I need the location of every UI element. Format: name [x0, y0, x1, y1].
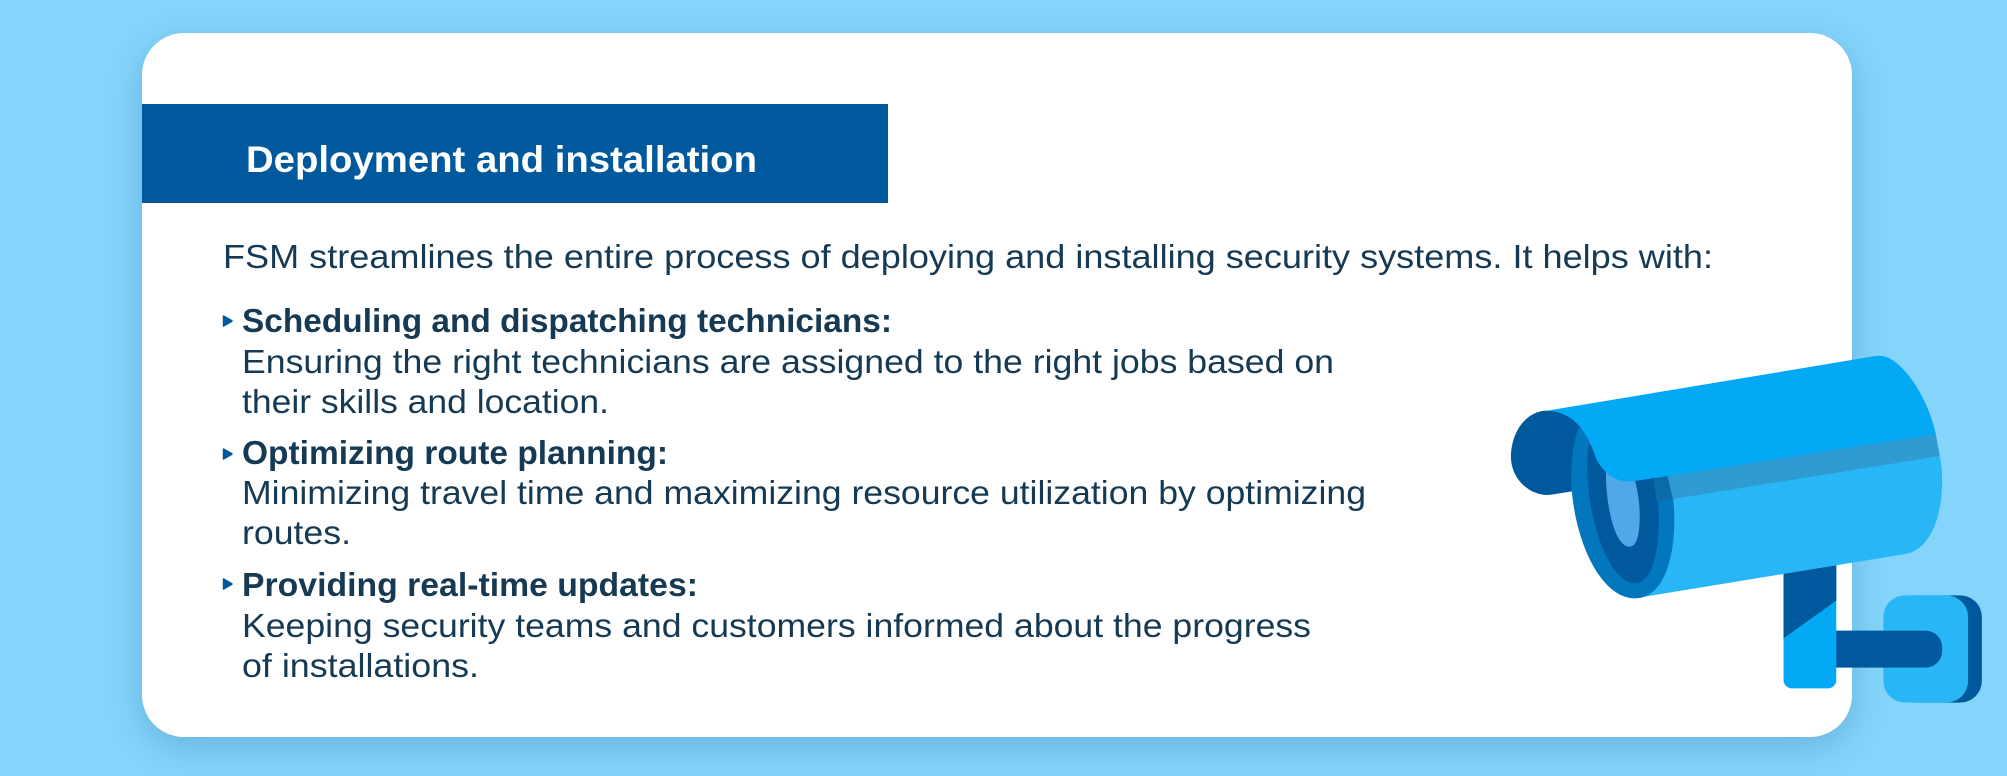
list item: scheduling: their skills and location. — [242, 384, 609, 421]
list item: scheduling: Scheduling and dispatching technicians: — [242, 302, 892, 339]
camera stand — [1784, 563, 1836, 688]
list item: real-time updates: Keeping security teams and customers informed about the progress — [242, 608, 1311, 645]
bullet arrow — [224, 579, 232, 589]
band shadow on lens — [1653, 476, 1673, 502]
list item: real-time updates: Providing real-time updates: — [242, 566, 698, 603]
lens ring — [1571, 428, 1674, 598]
bullet arrow — [224, 449, 232, 459]
heading banner: Deployment and installation — [246, 138, 757, 180]
list item: route planning: Optimizing route planning: — [242, 434, 668, 471]
camera hood — [1547, 356, 1936, 481]
list item: scheduling: Ensuring the right technicians are assigned to the right jobs based on — [242, 344, 1334, 381]
list item: real-time updates: of installations. — [242, 648, 479, 685]
camera body lower — [1635, 456, 1942, 598]
list item: route planning: routes. — [242, 515, 351, 552]
intro text: FSM streamlines the entire process of deploying and installing security systems. It helps with: — [223, 239, 1713, 276]
icon: security camera — [1511, 356, 1982, 703]
lens glass — [1606, 470, 1640, 547]
heading banner — [142, 104, 888, 203]
list item: real-time updates — [224, 566, 1311, 685]
list item: route planning — [224, 434, 1366, 552]
wall plate — [1883, 595, 1982, 703]
panel: white card — [142, 33, 1852, 737]
camera rear cap — [1511, 411, 1588, 495]
list item: route planning: Minimizing travel time and maximizing resource utilization by optimizing — [242, 475, 1366, 512]
list item: scheduling — [224, 302, 1334, 421]
lens inner — [1587, 443, 1659, 583]
mounting arm — [1833, 631, 1942, 668]
bullet arrow — [224, 316, 232, 326]
camera body band — [1668, 432, 1940, 499]
